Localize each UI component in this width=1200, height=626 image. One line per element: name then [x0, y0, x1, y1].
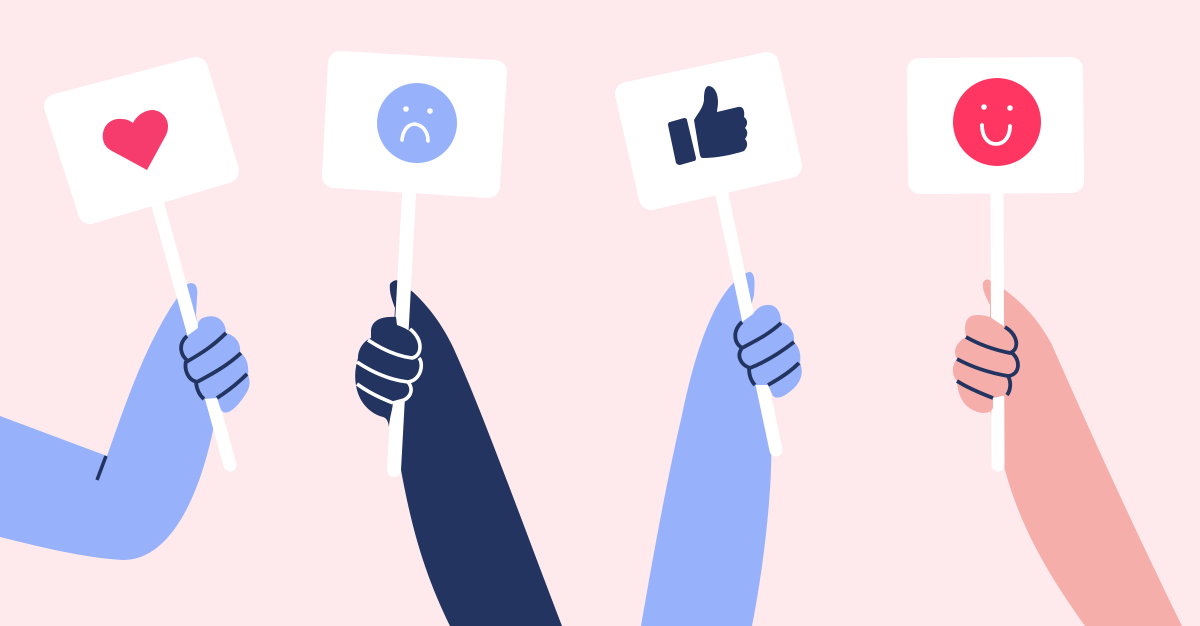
fist 4 — [953, 315, 1020, 413]
elbow crease — [97, 456, 106, 480]
icon: heart — [103, 110, 168, 170]
sign 1 with heart — [56, 69, 227, 212]
arm 1 — [0, 283, 215, 560]
fist 1 — [180, 316, 250, 413]
sign 2 with sad face — [334, 63, 495, 186]
arm 4 — [983, 279, 1182, 626]
fist 2 — [355, 317, 423, 427]
stick 2 — [394, 195, 409, 470]
figure 3: blue arm with thumbs-up sign — [627, 64, 802, 626]
stick 1 — [158, 205, 230, 465]
fist 3 — [735, 305, 802, 398]
stick 4 — [997, 190, 998, 465]
figure 4: pink arm with smiley sign — [919, 69, 1182, 626]
arm 3 — [641, 272, 771, 626]
sign 4 with smiley — [919, 69, 1072, 182]
icon: thumbs up — [668, 86, 747, 165]
stick 3 — [721, 190, 776, 450]
icon: smiley face — [953, 78, 1041, 166]
arm 2 — [389, 280, 562, 626]
figure 2: navy arm with sad face sign — [334, 63, 562, 626]
icon: sad face — [377, 83, 457, 163]
sign 3 with thumbs up — [627, 64, 790, 198]
figure 1: blue arm with heart sign — [0, 69, 250, 560]
